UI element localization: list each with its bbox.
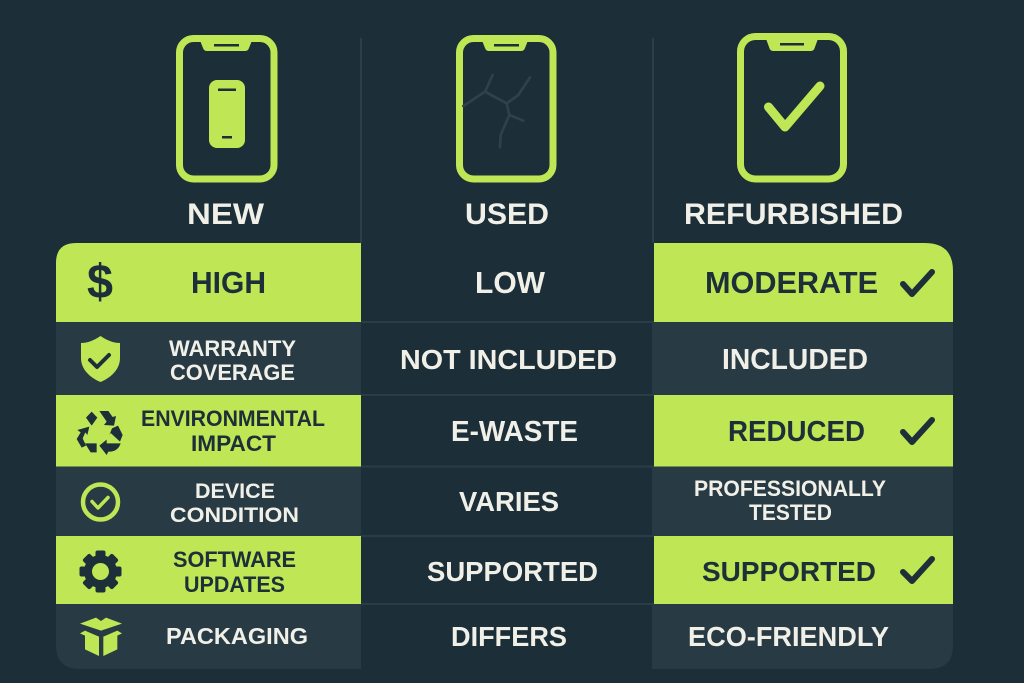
heading: used: USED xyxy=(465,198,549,231)
value: supported: SUPPORTED xyxy=(702,556,876,587)
label: device condition: CONDITION xyxy=(170,504,299,527)
icon: check xyxy=(903,559,932,581)
icon: check xyxy=(903,272,932,294)
label: environmental impact xyxy=(141,406,325,456)
icon: shield xyxy=(81,336,120,382)
icon: gear xyxy=(80,550,122,592)
value: not included: NOT INCLUDED xyxy=(400,344,617,375)
label: high: HIGH xyxy=(191,265,266,300)
label: packaging: PACKAGING xyxy=(166,623,308,649)
label: software updates: UPDATES xyxy=(184,572,285,597)
label: device condition: DEVICE xyxy=(195,480,275,503)
icon: dollar: $ xyxy=(87,256,113,309)
value: professionally tested xyxy=(694,476,886,525)
row: warranty xyxy=(56,322,953,395)
value: differs: DIFFERS xyxy=(451,621,567,652)
label: software updates: SOFTWARE xyxy=(173,547,296,572)
row: price xyxy=(56,243,953,322)
value: included: INCLUDED xyxy=(722,344,868,376)
panel: column headers xyxy=(180,36,903,231)
label: environmental impact: IMPACT xyxy=(191,431,277,456)
label: warranty coverage xyxy=(169,336,296,385)
icon: box xyxy=(80,618,122,656)
label: warranty coverage: COVERAGE xyxy=(170,360,295,385)
icon: check xyxy=(903,420,932,442)
icon: used phone with cracks xyxy=(460,38,553,179)
value: e-waste: E-WASTE xyxy=(451,416,578,448)
label: device condition xyxy=(170,480,299,527)
value: varies: VARIES xyxy=(459,486,559,517)
value: low: LOW xyxy=(475,265,546,300)
icon: recycle xyxy=(77,411,123,455)
row: device condition xyxy=(56,466,953,536)
value: eco-friendly: ECO-FRIENDLY xyxy=(688,621,889,652)
row: environmental impact xyxy=(56,395,953,466)
value: reduced: REDUCED xyxy=(728,416,865,448)
value: supported: SUPPORTED xyxy=(427,556,598,587)
icon: circled check xyxy=(83,484,118,520)
icon: new phone xyxy=(180,38,274,179)
value: moderate: MODERATE xyxy=(705,265,878,300)
label: software updates xyxy=(173,547,296,597)
heading: new: NEW xyxy=(187,198,265,231)
label: environmental impact: ENVIRONMENTAL xyxy=(141,406,325,431)
icon: refurbished phone with check xyxy=(740,36,844,179)
row: packaging xyxy=(56,604,953,669)
label: warranty coverage: WARRANTY xyxy=(169,336,296,361)
heading: refurbished: REFURBISHED xyxy=(684,198,903,231)
value: professionally tested: TESTED xyxy=(749,500,832,525)
row: software updates xyxy=(56,536,953,604)
value: professionally tested: PROFESSIONALLY xyxy=(694,476,886,501)
